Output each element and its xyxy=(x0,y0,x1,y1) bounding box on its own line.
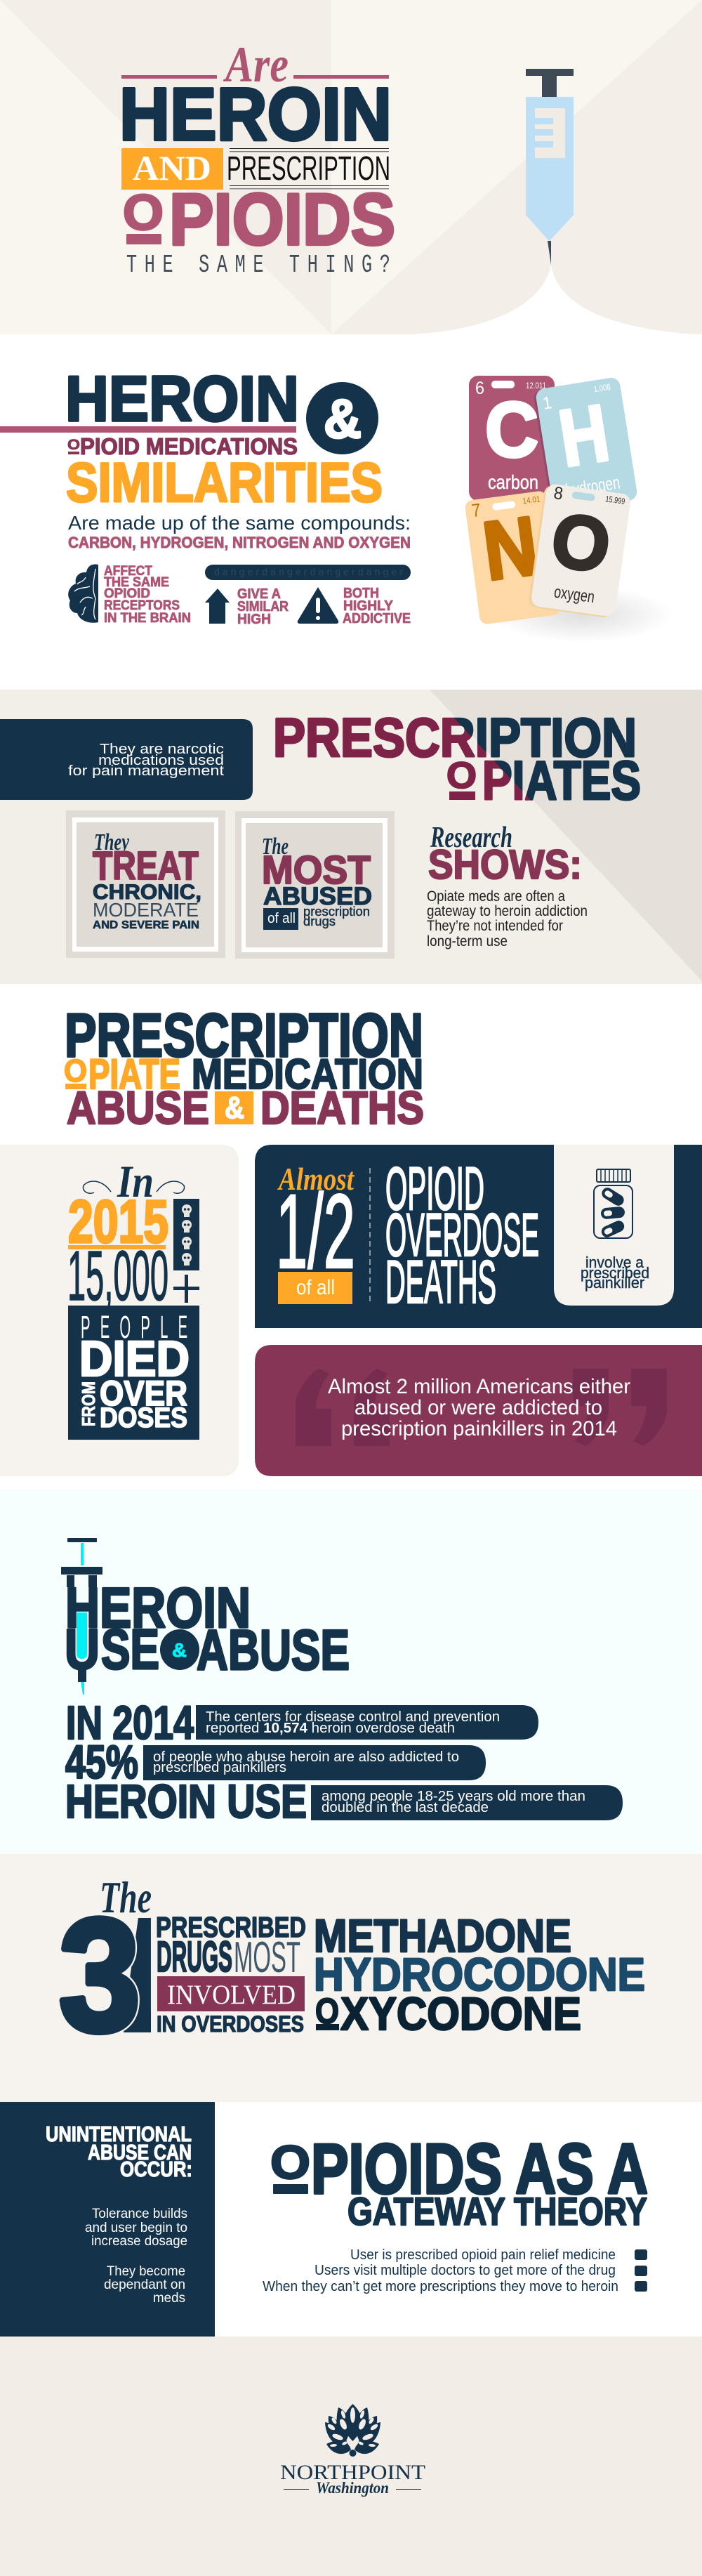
heading: abuse and deaths: PIATE xyxy=(88,1051,180,1098)
drug: methadone: METHADONE xyxy=(314,1910,571,1961)
ampersand badge: & xyxy=(324,388,362,449)
heading: OPIATES xyxy=(446,749,641,811)
text: similar high: GIVE A xyxy=(237,586,281,602)
heading: HEROIN: HEROIN xyxy=(65,364,299,435)
stat: heroin use: among people 18-25 years old more than xyxy=(322,1789,585,1804)
card: they treat: TREAT xyxy=(93,843,199,888)
box: people died xyxy=(68,1306,199,1440)
title xyxy=(119,37,395,280)
list: gateway steps: User is prescribed opioid pain relief medicine xyxy=(350,2247,616,2263)
fraction: 1/2: 1/2 xyxy=(276,1172,355,1290)
text: affect receptors: OPIOID xyxy=(104,586,150,601)
text: highly addictive: HIGHLY xyxy=(343,598,394,614)
text: research findings xyxy=(427,888,588,949)
text: prescribed drugs most involved: MOST xyxy=(234,1933,300,1982)
card: most abused: MOST xyxy=(262,848,371,893)
heading: opioids as a gateway theory xyxy=(270,2130,648,2233)
danger tape xyxy=(205,565,411,580)
text: involve a prescribed painkiller: painkiller xyxy=(585,1274,644,1292)
script: In: In xyxy=(117,1157,154,1207)
heading: abuse and deaths: O xyxy=(64,1053,87,1089)
year: 2015: 2015 xyxy=(68,1188,168,1256)
card: nitrogen: 7 xyxy=(470,499,482,521)
text: prescribed drugs most involved xyxy=(156,1911,306,2037)
cream tab xyxy=(554,1145,674,1306)
text: compounds intro: Are made up of the same compounds: xyxy=(68,512,411,534)
text: prescribed drugs most involved: PRESCRIBED xyxy=(156,1911,306,1943)
quote text xyxy=(328,1375,630,1440)
navy tab: They are narcotic xyxy=(100,742,224,757)
plus sign xyxy=(173,1275,199,1303)
card: nitrogen: 14.01 xyxy=(522,494,541,506)
heading: opioid medications: PIOID MEDICATIONS xyxy=(80,433,298,459)
icon: brain xyxy=(68,565,98,623)
section: title header xyxy=(0,0,702,334)
card: they treat: MODERATE xyxy=(93,899,199,921)
card: they treat: AND SEVERE PAIN xyxy=(93,919,199,931)
card: hydrogen: H xyxy=(554,388,615,484)
text: tolerance xyxy=(85,2207,187,2249)
card: they treat: They xyxy=(94,829,130,855)
card: hydrogen xyxy=(533,376,638,513)
text: opioid overdose deaths: OPIOID xyxy=(385,1155,484,1223)
text: tolerance: Tolerance builds xyxy=(92,2207,187,2221)
box: people died: DOSES xyxy=(100,1402,187,1433)
navy tab: medications used xyxy=(98,753,224,768)
big numeral: 3: 3 xyxy=(59,1886,140,2065)
stat: 45%: prescribed painkillers xyxy=(153,1760,286,1775)
section: prescription opiates xyxy=(0,690,702,984)
text: prescribed drugs most involved: DRUGS xyxy=(157,1933,232,1980)
panel: unintentional abuse: ABUSE CAN xyxy=(88,2140,192,2164)
quote text: abused or were addicted to xyxy=(355,1396,602,1419)
title word: Are: Are xyxy=(223,37,289,93)
text: research findings: Opiate meds are often a xyxy=(427,888,565,905)
card: they treat: CHRONIC, xyxy=(93,881,201,904)
big numeral: 3: 3 xyxy=(59,1886,140,2065)
text: opioid overdose deaths: DEATHS xyxy=(385,1249,496,1316)
panel: unintentional abuse: UNINTENTIONAL xyxy=(46,2122,192,2146)
stat: 45%: 45% xyxy=(65,1736,138,1789)
logo: northpoint mark xyxy=(325,2404,380,2457)
text: compounds list: CARBON, HYDROGEN, NITROGEN AND OXYGEN xyxy=(68,534,411,551)
text: research findings: long-term use xyxy=(427,933,508,949)
text: dependant: meds xyxy=(153,2291,185,2306)
heading: OPIATES: PIATES xyxy=(482,749,641,811)
panel: half of overdose deaths xyxy=(255,1145,702,1328)
heading: OPIATES: O xyxy=(446,755,477,796)
stat: heroin use xyxy=(65,1775,623,1828)
text: similar high xyxy=(237,586,289,627)
list: gateway steps xyxy=(263,2247,647,2294)
stat: in 2014: reported 10,574 heroin overdose death xyxy=(206,1721,455,1736)
text: highly addictive: BOTH xyxy=(343,586,379,601)
script: The: The xyxy=(100,1872,152,1922)
card: hydrogen: 1,008 xyxy=(593,382,611,394)
logo: NORTHPOINT wordmark: NORTHPOINT xyxy=(280,2461,425,2484)
section: footer xyxy=(0,2337,702,2576)
drug: oxycodone: XYCODONE xyxy=(340,1987,581,2039)
text: affect receptors: RECEPTORS xyxy=(104,598,180,613)
ampersand badge xyxy=(306,382,378,454)
navy tab: for pain management xyxy=(68,763,225,779)
box: people died: FROM xyxy=(78,1381,99,1426)
heading: opioid medications: O xyxy=(67,437,80,453)
syringe heading xyxy=(61,1538,350,1695)
text: dependant: dependant on xyxy=(104,2278,185,2292)
section: gateway theory xyxy=(0,2102,702,2337)
syringe heading: HEROIN xyxy=(65,1577,251,1640)
card: oxygen: 15.999 xyxy=(605,494,625,506)
card: most abused: prescription xyxy=(303,905,370,919)
card: nitrogen xyxy=(464,490,562,625)
text: involve a prescribed painkiller: involve a xyxy=(585,1254,644,1271)
drug: hydrocodone: HYDROCODONE xyxy=(314,1948,645,2000)
logo: Washington script: Washington xyxy=(316,2479,389,2497)
card: carbon: 6 xyxy=(475,379,484,398)
text: affect receptors xyxy=(104,564,191,626)
section: heroin use and abuse xyxy=(0,1489,702,1854)
big numeral: 3 xyxy=(59,1915,151,2035)
text: dependant: They become xyxy=(107,2264,185,2279)
icon: warning triangle xyxy=(298,587,338,624)
box: people died: OVER xyxy=(100,1374,187,1413)
text: research findings: They’re not intended for xyxy=(427,918,563,934)
card: most abused: The xyxy=(262,834,289,860)
heading: abuse and deaths: MEDICATION xyxy=(192,1051,423,1098)
quote text: Almost 2 million Americans either xyxy=(328,1375,630,1398)
text: involve a prescribed painkiller xyxy=(581,1254,649,1292)
subtitle: THE SAME THING? xyxy=(126,251,390,280)
box: people died: PEOPLE xyxy=(81,1310,187,1345)
card: most abused: drugs xyxy=(303,914,336,928)
danger tape: dangerdangerdangerdanger xyxy=(214,566,403,577)
icon: syringe xyxy=(526,69,574,265)
syringe heading: & xyxy=(172,1639,187,1661)
heading: abuse and deaths: PRESCRIPTION xyxy=(65,1001,423,1070)
card: oxygen xyxy=(528,482,632,619)
badge: of all: of all xyxy=(296,1276,335,1299)
script: Almost: Almost xyxy=(277,1161,355,1197)
text: research findings: gateway to heroin addiction xyxy=(427,903,588,919)
text: opioid overdose deaths xyxy=(385,1155,539,1316)
badge: AND: AND xyxy=(133,148,211,188)
heading: abuse and deaths: DEATHS xyxy=(260,1082,424,1133)
text: similar high: HIGH xyxy=(237,612,271,627)
heading: opioids as a gateway theory: GATEWAY THEORY xyxy=(347,2189,647,2233)
heading: abuse and deaths: & xyxy=(225,1091,244,1125)
syringe heading: ABUSE xyxy=(197,1619,350,1682)
text: highly addictive: ADDICTIVE xyxy=(343,611,411,626)
section: abuse and deaths xyxy=(0,984,702,1489)
card: most abused xyxy=(235,811,395,959)
heading: opioids as a gateway theory: O xyxy=(270,2136,310,2189)
panel: unintentional abuse: OCCUR: xyxy=(120,2157,192,2181)
stat: heroin use: HEROIN USE xyxy=(65,1775,307,1828)
title word: PRESCRIPTION: PRESCRIPTION xyxy=(227,150,390,188)
card: they treat xyxy=(66,810,225,958)
text: prescribed drugs most involved: IN OVERDOSES xyxy=(157,2011,304,2037)
heading: PRESCRIPTION: PRESCRIPTION xyxy=(273,707,637,768)
icon: pill bottle xyxy=(594,1169,633,1238)
panel: 2015 statistic: 15,000 xyxy=(67,1237,168,1315)
text: tolerance: increase dosage xyxy=(91,2234,187,2249)
syringe heading: SE xyxy=(101,1618,159,1681)
panel: unintentional abuse xyxy=(0,2102,215,2337)
card: hydrogen: 1 xyxy=(541,393,553,414)
badge: of all xyxy=(278,1272,352,1304)
title word: OPIOIDS: PIOIDS xyxy=(169,179,395,261)
card: oxygen: O xyxy=(547,497,616,589)
stat: heroin use: doubled in the last decade xyxy=(322,1800,489,1815)
text: affect receptors: AFFECT xyxy=(104,564,152,579)
quote marks xyxy=(296,1369,667,1446)
element cards xyxy=(464,376,674,643)
heading: research shows: SHOWS: xyxy=(428,842,582,888)
text: dependant xyxy=(104,2264,185,2306)
list: gateway steps: When they can’t get more prescriptions they move to heroin xyxy=(263,2279,618,2294)
heading: abuse and deaths: ABUSE xyxy=(67,1082,209,1133)
text: affect receptors: IN THE BRAIN xyxy=(104,611,191,626)
stat: 45% xyxy=(65,1736,486,1789)
text: highly addictive xyxy=(343,586,411,626)
text: involve a prescribed painkiller: prescribed xyxy=(581,1264,649,1282)
card: oxygen: oxygen xyxy=(553,582,596,607)
title word: HEROIN: HEROIN xyxy=(119,73,392,156)
heading: abuse and deaths xyxy=(64,1001,424,1133)
card: oxygen: 8 xyxy=(552,483,564,504)
card: most abused: of all xyxy=(267,911,296,926)
drug: oxycodone: O xyxy=(315,1991,339,2031)
navy tab xyxy=(0,719,253,800)
heading: SIMILARITIES: SIMILARITIES xyxy=(66,451,383,513)
section: three drugs xyxy=(0,1854,702,2102)
card: nitrogen: N xyxy=(478,499,543,598)
stat: in 2014 xyxy=(66,1697,538,1749)
big numeral: 3: 1 xyxy=(78,1882,182,2068)
icon: up arrow xyxy=(205,589,230,624)
text: prescribed drugs most involved: INVOLVED xyxy=(167,1980,296,2010)
panel: 2015 statistic xyxy=(0,1145,239,1476)
section: similarities xyxy=(0,334,702,690)
skull strip xyxy=(173,1199,199,1270)
heading: research shows: Research xyxy=(430,822,512,854)
syringe heading: U xyxy=(65,1618,100,1681)
stat: in 2014: The centers for disease control and prevention xyxy=(206,1709,500,1725)
card: carbon xyxy=(469,376,555,501)
quote text: prescription painkillers in 2014 xyxy=(341,1417,617,1440)
card: carbon: 12.011 xyxy=(526,381,546,390)
card: hydrogen: hydrogen xyxy=(564,471,621,501)
text: affect receptors: THE SAME xyxy=(104,575,169,590)
card: most abused: ABUSED xyxy=(263,883,372,910)
card: carbon: C xyxy=(485,387,538,473)
stat: 45%: of people who abuse heroin are also addicted to xyxy=(153,1749,459,1765)
list: gateway steps: Users visit multiple doctors to get more of the drug xyxy=(314,2263,616,2278)
flourishes xyxy=(83,1181,185,1193)
text: similar high: SIMILAR xyxy=(237,599,289,615)
card: carbon: carbon xyxy=(488,471,538,493)
heading: research shows xyxy=(428,822,582,888)
stat: in 2014: IN 2014 xyxy=(66,1697,194,1749)
title word: OPIOIDS: O xyxy=(123,185,164,241)
text: tolerance: and user begin to xyxy=(85,2221,187,2235)
box: people died: DIED xyxy=(79,1332,190,1387)
panel: 2 million quote xyxy=(255,1345,702,1476)
